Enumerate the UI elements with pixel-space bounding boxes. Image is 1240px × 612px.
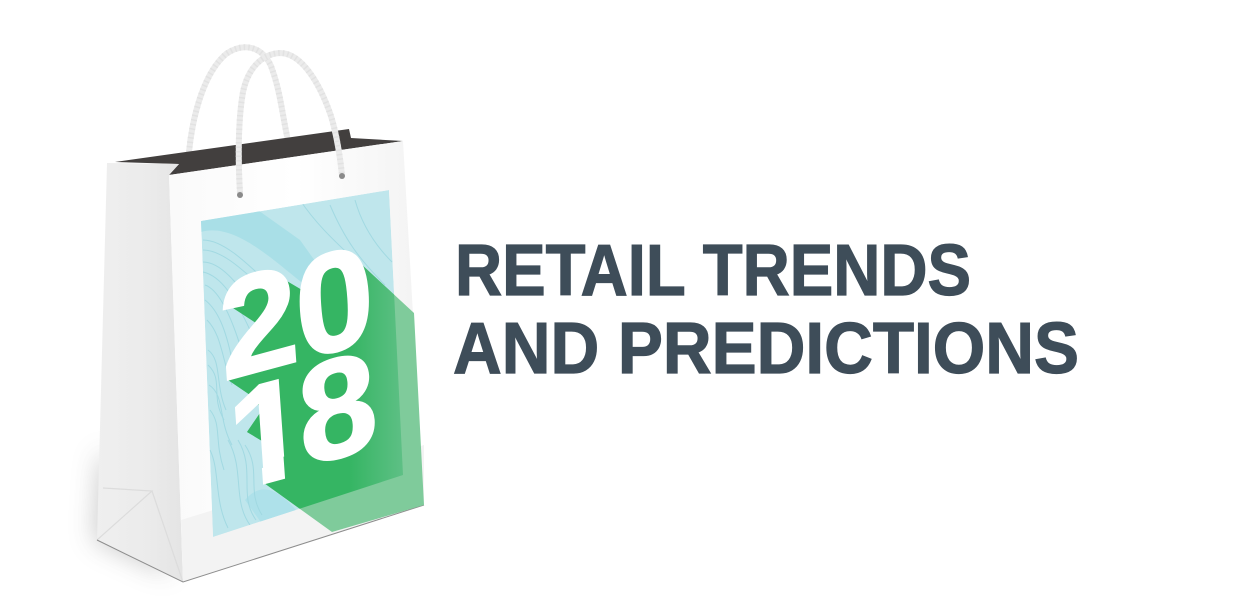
shopping bag: [97, 47, 424, 582]
digits 20: 20: [214, 214, 377, 411]
green long shadow, on poster: [228, 266, 403, 509]
rope eyelets: [237, 173, 345, 198]
handle: back rope: [189, 47, 287, 152]
year 2018: [222, 250, 375, 485]
poster: marble: [201, 190, 403, 537]
green long shadow, outside poster: [228, 262, 424, 532]
handle: front rope: [239, 53, 342, 193]
bag front panel: [169, 141, 424, 582]
title line 1: RETAIL TRENDS: [455, 231, 971, 311]
bag shadow: [94, 450, 170, 575]
bag side panel: [97, 163, 183, 582]
digit 8: 8: [293, 320, 382, 497]
title line 2: AND PREDICTIONS: [453, 309, 1079, 389]
digit 1: 1: [223, 342, 313, 522]
bag base edge: [97, 505, 424, 582]
bag interior: [115, 129, 403, 175]
bag front lower band: [181, 445, 424, 582]
bag side folds: [97, 488, 183, 582]
title: [453, 231, 1079, 389]
